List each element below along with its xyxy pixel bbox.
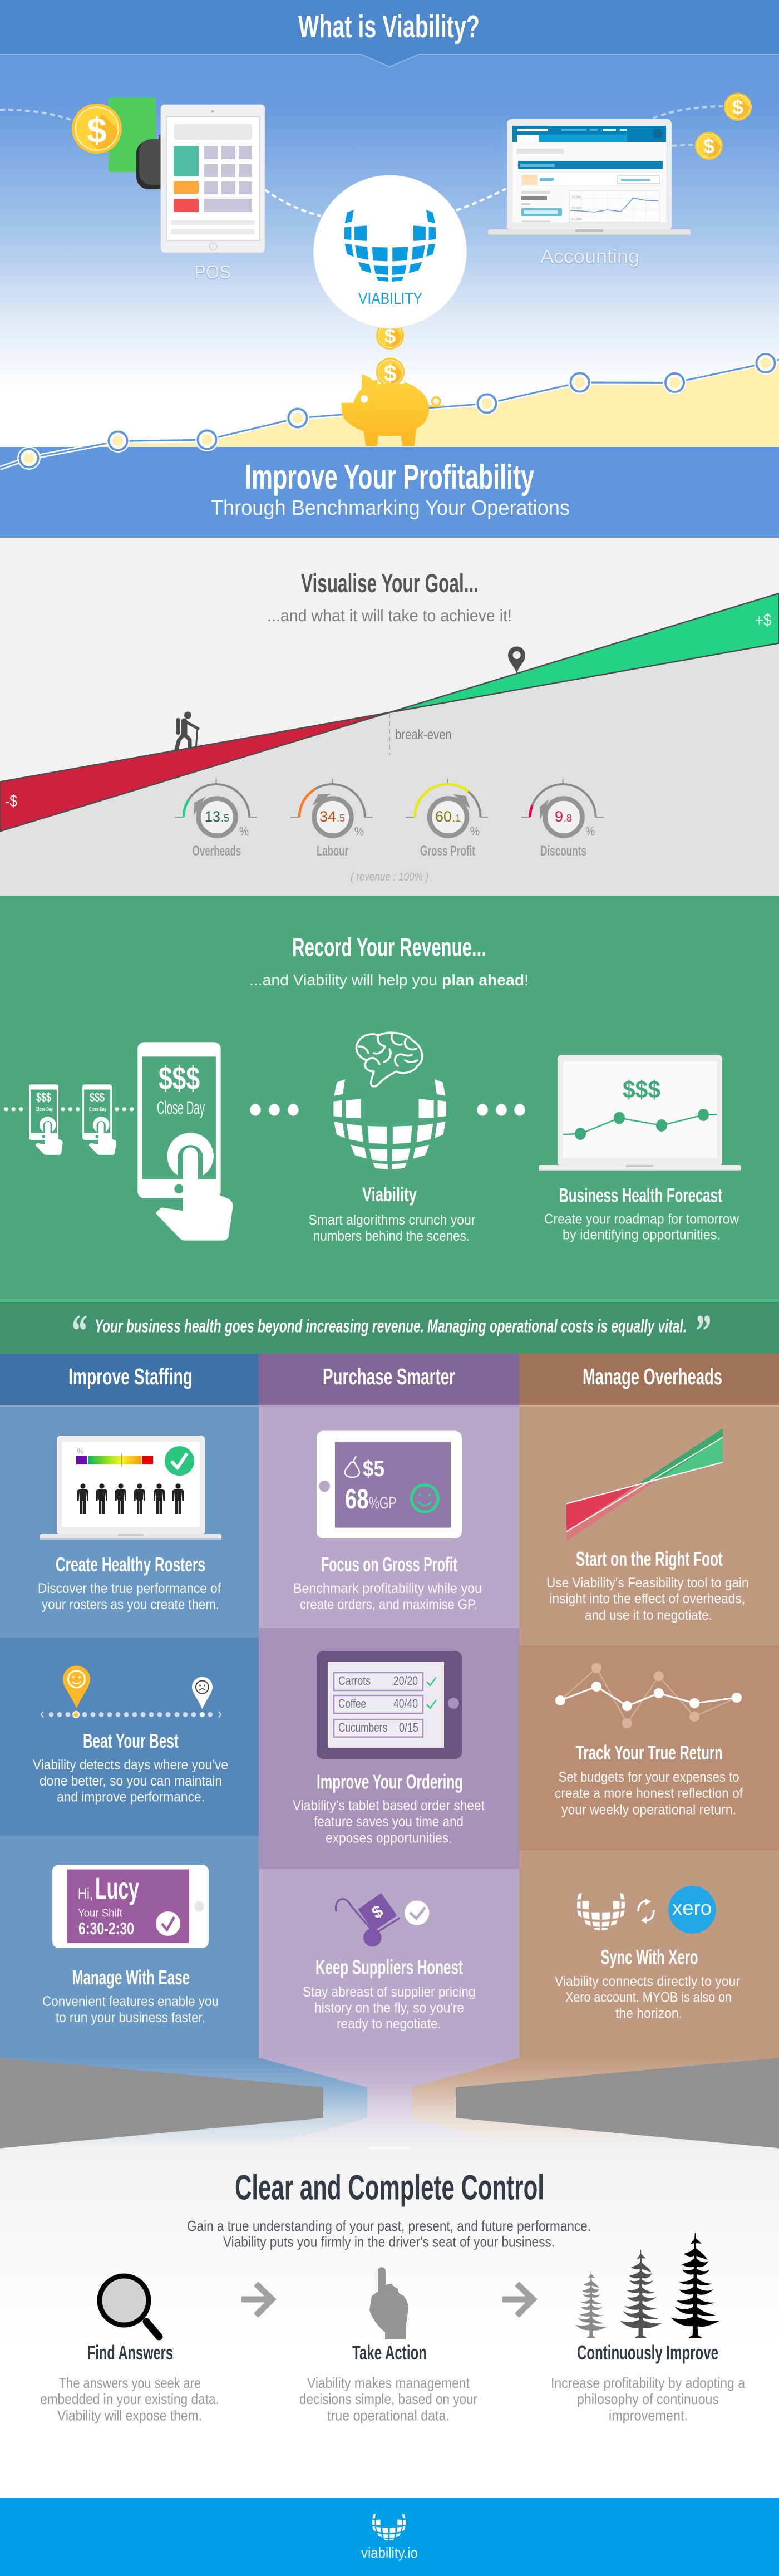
text block: find answers: [40, 2341, 219, 2423]
panel: manage with ease: Manage With Ease: [72, 1966, 190, 1989]
icon: gross profit tablet: %GP: [369, 1494, 396, 1512]
text block: viability: [308, 1184, 475, 1244]
icon: magnifying glass: [100, 2276, 159, 2337]
icon: timeline pins: [41, 1666, 221, 1718]
panel: sync with xero: Sync With Xero: [601, 1946, 698, 1968]
gauge: gross profit: %: [470, 824, 480, 838]
icon: large coin: $: [87, 110, 107, 150]
quote band: [0, 1299, 779, 1357]
heading: Visualise Your Goal...: [301, 568, 479, 598]
panel: beat your best: Beat Your Best: [83, 1729, 179, 1752]
panel: keep suppliers honest: history on the fly, so you're: [314, 2000, 464, 2016]
gauge: labour: %: [354, 824, 364, 838]
icon: large coin: [72, 104, 122, 154]
chart: rising profit line: [0, 352, 779, 538]
panel: focus on gross profit: Benchmark profitability while you: [293, 1581, 482, 1596]
footer logo: [372, 2514, 406, 2540]
icon: shift tablet: Lucy: [95, 1871, 139, 1906]
panel: create healthy rosters: Discover the true performance of: [38, 1581, 221, 1596]
dots row middle: [250, 1104, 299, 1116]
gauge: discounts: 9: [555, 808, 563, 825]
gauge: discounts: .8: [564, 813, 572, 824]
icon: small tree: [575, 2271, 608, 2338]
text block: viability: Viability: [362, 1184, 417, 1206]
panel: sync with xero: Xero account. MYOB is also on: [565, 1990, 732, 2005]
intro text: Gain a true understanding of your past, present, and future performance.: [187, 2218, 591, 2234]
label: minus dollars: -$: [5, 792, 17, 810]
icon: coin falling: $: [384, 325, 396, 347]
break-even marker: [389, 714, 452, 755]
icon: order sheet tablet: Carrots: [338, 1674, 371, 1688]
column: purchase smarter: [259, 1354, 519, 2148]
icon: forecast laptop: [539, 1055, 741, 1171]
break-even marker: break-even: [395, 727, 452, 743]
band text: improve your profitability: Through Benchmarking Your Operations: [211, 496, 570, 520]
intro text: [187, 2218, 591, 2250]
icon: order sheet tablet: Cucumbers: [338, 1720, 387, 1734]
viability logo circle: [313, 175, 467, 328]
gauge: labour: .5: [337, 813, 345, 824]
converging road: fading columns: [0, 2054, 779, 2149]
gauge: gross profit: 60: [435, 808, 452, 825]
icon: roster laptop: %: [77, 1447, 84, 1456]
icon: accounting laptop: 25,000: [571, 196, 582, 199]
icon: large phone with hand: $$$: [159, 1060, 200, 1097]
panel: start on the right foot: [546, 1428, 749, 1623]
text block: viability: Smart algorithms crunch your: [308, 1212, 475, 1228]
icon: roster laptop: [40, 1436, 221, 1540]
panel: manage with ease: [42, 1865, 219, 2026]
column: improve staffing: [0, 1354, 259, 2058]
label: plus dollars: +$: [755, 611, 771, 630]
viability logo circle: VIABILITY: [358, 290, 422, 308]
panel: focus on gross profit: [293, 1431, 482, 1613]
band text: improve your profitability: [211, 458, 570, 520]
icon: order sheet tablet: 0/15: [399, 1720, 418, 1734]
panel: keep suppliers honest: Keep Suppliers Honest: [315, 1956, 463, 1979]
icon: small phone two: [82, 1084, 116, 1155]
panel: keep suppliers honest: [303, 1893, 475, 2032]
icon: piggy bank with coin: $: [384, 360, 397, 386]
gauge: gross profit: [406, 779, 488, 859]
intro text: Viability puts you firmly in the driver's seat of your business.: [223, 2233, 555, 2250]
section background: control gradient: [0, 2149, 779, 2498]
icon: coin falling: [376, 322, 404, 350]
icon: viability logo: [577, 1893, 625, 1930]
label: POS: POS: [194, 262, 231, 282]
gauge: overheads: %: [239, 824, 249, 838]
text block: business health forecast: by identifying opportunities.: [563, 1227, 721, 1243]
dots row left: [4, 1107, 134, 1111]
band text: improve your profitability: Improve Your Profitability: [245, 458, 534, 496]
panel: beat your best: Viability detects days where you’ve: [33, 1757, 228, 1773]
text block: take action: decisions simple, based on your: [299, 2391, 477, 2407]
gauge: labour: Labour: [317, 843, 348, 859]
gauge: overheads: Overheads: [193, 843, 241, 859]
icon: forecast laptop: $$$: [623, 1076, 660, 1104]
arrow: two: [502, 2284, 533, 2316]
dashed flow lines: [0, 106, 723, 216]
icon: map pin goal: [508, 646, 525, 674]
icon: gross profit tablet: $5: [363, 1457, 384, 1481]
panel: improve your ordering: feature saves you time and: [314, 1814, 464, 1830]
column heading: Purchase Smarter: [323, 1364, 455, 1389]
text block: take action: Viability makes management: [307, 2375, 470, 2391]
icon: hand truck with check: [336, 1893, 429, 1946]
chart: profit wedge: [389, 593, 779, 712]
icon: hand truck with check: $: [368, 1901, 386, 1923]
column heading: Improve Staffing: [68, 1364, 193, 1389]
title: What is Viability?: [298, 9, 480, 45]
panel: track your true return: your weekly operational return.: [561, 1802, 736, 1818]
icon: gross profit tablet: [317, 1431, 462, 1538]
icon: small coin top right: [724, 93, 752, 121]
panel: sync with xero: the horizon.: [615, 2006, 682, 2022]
icon: viability logo: [333, 1079, 446, 1169]
chart: operational return line: [555, 1663, 742, 1728]
gauge: discounts: Discounts: [540, 843, 586, 859]
dots row right: [477, 1104, 525, 1116]
label: accounting: Accounting: [540, 246, 639, 267]
heading: Record Your Revenue...: [292, 933, 486, 962]
panel: manage with ease: to run your business faster.: [56, 2010, 205, 2026]
footer url: viability.io: [361, 2544, 418, 2561]
quote band: ”: [694, 1305, 711, 1357]
icon: small phone one: Close Day: [36, 1107, 53, 1113]
panel: sync with xero: [555, 1886, 740, 2022]
text block: continuously improve: [551, 2341, 745, 2423]
quote band: “: [70, 1305, 87, 1357]
icon: gross profit tablet: 68: [345, 1483, 368, 1515]
panel: start on the right foot: insight into the effect of overheads,: [550, 1591, 745, 1607]
icon: large tree: [671, 2233, 721, 2338]
panel: improve your ordering: [259, 1628, 519, 1869]
panel: track your true return: create a more honest reflection of: [555, 1786, 743, 1801]
panel: beat your best: and improve performance.: [57, 1789, 205, 1805]
icon: small phone two: Close Day: [89, 1107, 106, 1113]
gauge: labour: [290, 779, 373, 859]
icon: accounting laptop: 15,000: [571, 218, 582, 222]
icon: order sheet tablet: 40/40: [393, 1697, 418, 1710]
gauge: discounts: [521, 779, 604, 859]
icon: small coin middle right: [695, 132, 723, 160]
panel: beat your best: [0, 1638, 259, 1836]
icon: small coin middle right: $: [703, 135, 714, 158]
section: what is viability: [0, 0, 779, 538]
panel: manage with ease: Convenient features enable you: [42, 1994, 219, 2009]
text block: take action: true operational data.: [327, 2407, 450, 2423]
column: manage overheads: [519, 1354, 779, 2058]
panel: sync with xero: Viability connects directly to your: [555, 1974, 740, 1989]
arrow: one: [241, 2284, 272, 2316]
gauge: overheads: .5: [221, 813, 229, 824]
panel: start on the right foot: and use it to negotiate.: [585, 1607, 712, 1623]
subheading: ...and Viability will help you plan ahead!: [249, 971, 529, 989]
icon: POS tablet: [161, 105, 265, 253]
panel: create healthy rosters: Create Healthy Rosters: [56, 1553, 205, 1576]
text block: take action: [299, 2341, 477, 2423]
section: visualise your goal: [0, 538, 779, 896]
icon: small coin top right: $: [732, 96, 743, 119]
icon: small phone two: $$$: [90, 1090, 105, 1104]
icon: shift tablet: 6:30-2:30: [78, 1919, 134, 1938]
panel: focus on gross profit: create orders, and maximise GP.: [300, 1597, 477, 1613]
icon: large phone with hand: Close Day: [157, 1098, 205, 1118]
icon: hiker: [176, 711, 198, 750]
icon: sync arrows: [638, 1899, 654, 1924]
panel: create healthy rosters: [38, 1436, 221, 1613]
icon: small phone one: [29, 1084, 63, 1155]
footer: [0, 2498, 779, 2576]
icon: accounting laptop: [488, 119, 691, 235]
panel: keep suppliers honest: Stay abreast of supplier pricing: [303, 1984, 475, 2000]
road: left grey wedge: [0, 2058, 323, 2149]
icon: brain: [356, 1033, 422, 1087]
panel: create healthy rosters: your rosters as you create them.: [42, 1597, 219, 1613]
panel: focus on gross profit: Focus on Gross Profit: [321, 1553, 457, 1576]
panel: improve your ordering: Viability's tablet based order sheet: [293, 1798, 485, 1813]
section: record your revenue: [0, 896, 779, 1299]
text block: continuously improve: philosophy of continuous: [577, 2391, 719, 2407]
text block: business health forecast: Create your roadmap for tomorrow: [544, 1212, 739, 1227]
icon: order sheet tablet: Coffee: [338, 1697, 366, 1710]
gauge: overheads: [175, 779, 257, 859]
text block: continuously improve: Increase profitability by adopting a: [551, 2375, 745, 2391]
text block: find answers: Viability will expose them.: [57, 2407, 202, 2423]
gauge: gross profit: Gross Profit: [420, 843, 475, 859]
panel: keep suppliers honest: ready to negotiate.: [337, 2016, 441, 2032]
text block: take action: Take Action: [352, 2341, 427, 2364]
icon: accounting laptop: 20,000: [571, 207, 582, 210]
section: clear and complete control: [40, 2169, 745, 2423]
text block: continuously improve: improvement.: [609, 2407, 688, 2423]
panel: track your true return: [519, 1645, 779, 1850]
icon: large phone with hand: [137, 1042, 233, 1241]
note: revenue 100%: ( revenue : 100% ): [351, 871, 428, 883]
gauge: overheads: 13: [205, 808, 220, 825]
subheading: ...and what it will take to achieve it!: [267, 607, 512, 625]
title band: [0, 0, 779, 67]
gauge: gross profit: .1: [452, 813, 461, 824]
gauge: discounts: %: [585, 824, 595, 838]
chart: feasibility wedges: [566, 1428, 723, 1541]
text block: find answers: The answers you seek are: [59, 2375, 201, 2391]
icon: shift tablet: Your Shift: [78, 1907, 122, 1919]
icon: order sheet tablet: [317, 1651, 462, 1759]
panel: start on the right foot: Use Viability's Feasibility tool to gain: [546, 1575, 749, 1591]
text block: business health forecast: [544, 1184, 739, 1243]
panel: track your true return: Set budgets for your expenses to: [559, 1769, 739, 1785]
icon: xero badge: [668, 1886, 716, 1934]
panel: improve your ordering: Improve Your Ordering: [317, 1771, 463, 1793]
gauge: labour: 34: [319, 808, 336, 825]
icon: xero badge: xero: [672, 1896, 712, 1919]
icon: medium tree: [620, 2250, 663, 2338]
panel: beat your best: done better, so you can maintain: [40, 1773, 222, 1789]
icon: card reader and cash: [109, 97, 172, 189]
heading: Clear and Complete Control: [235, 2169, 544, 2208]
text block: find answers: Find Answers: [87, 2341, 173, 2364]
icon: pointing hand: [369, 2267, 408, 2339]
icon: small phone one: $$$: [36, 1090, 51, 1104]
icon: shift tablet: Hi,: [78, 1885, 93, 1902]
icon: order sheet tablet: 20/20: [393, 1674, 418, 1688]
panel: improve your ordering: exposes opportunities.: [326, 1831, 452, 1846]
icon: shift tablet: [52, 1865, 209, 1948]
chart: loss wedge: [0, 712, 389, 832]
icon: piggy bank with coin: [342, 358, 444, 446]
text block: find answers: embedded in your existing data.: [40, 2391, 219, 2407]
text block: viability: numbers behind the scenes.: [313, 1228, 470, 1244]
road: right grey wedge: [456, 2058, 779, 2149]
